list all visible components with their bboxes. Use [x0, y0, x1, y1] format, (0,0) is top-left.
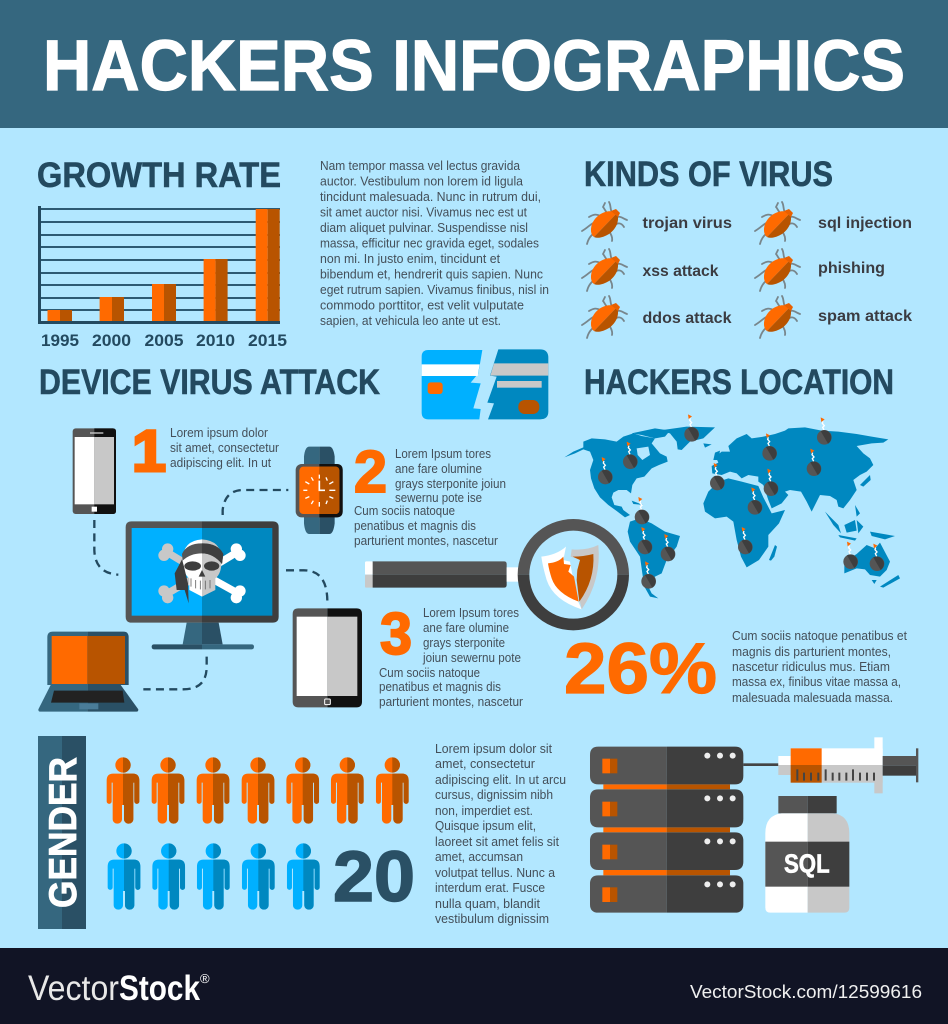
text block: growth rate description: sapien, at vehicula leo ante ut est.	[320, 314, 501, 328]
text block: step 2: Cum sociis natoque	[354, 504, 455, 518]
statistic: 26%: 26%	[564, 630, 717, 709]
item: ddos attack: ddos attack	[642, 310, 732, 327]
image id text: VectorStock.com/12599616	[690, 982, 922, 1002]
text block: gender description: nulla quam, blandit	[435, 897, 540, 911]
icon: monitor with pirate skull	[126, 521, 279, 649]
inland water	[637, 447, 650, 460]
text block: location description	[732, 629, 907, 705]
server unit 2	[590, 789, 743, 827]
logo: VectorStock: ®	[200, 971, 210, 986]
icon: laptop	[38, 632, 138, 712]
icon: SQL bottle	[765, 796, 849, 913]
icon: broken credit card	[422, 349, 548, 419]
heading: kinds of virus: KINDS OF VIRUS	[584, 155, 833, 194]
world map with bomb markers	[564, 414, 900, 598]
text block: step 3	[379, 606, 523, 709]
icon: SQL bottle: SQL	[784, 849, 830, 879]
text block: gender description: non, imperdiet est.	[435, 804, 533, 818]
icon: syringe	[743, 737, 918, 793]
crossbones	[158, 543, 246, 603]
text block: step 1: sit amet, consectetur	[170, 441, 279, 455]
text block: step 3: Cum sociis natoque	[379, 666, 480, 680]
panel: gender label: GENDER	[42, 757, 85, 908]
text block: gender description	[435, 742, 566, 926]
text block: growth rate description: non mi. In justo enim, tincidunt et	[320, 252, 500, 266]
heading: hackers location: HACKERS LOCATION	[584, 363, 894, 402]
list: kinds of virus	[582, 202, 912, 338]
icon: server stack	[590, 747, 743, 913]
year labels: 2005	[144, 331, 184, 350]
heading: growth rate: GROWTH RATE	[37, 156, 281, 195]
text block: step 3: joiun sewernu pote	[422, 651, 521, 665]
bar 2005	[152, 284, 176, 321]
text block: gender description: amet, consectetur	[435, 757, 535, 771]
text block: gender description: Lorem ipsum dolor sit	[435, 742, 552, 756]
bar 2000	[100, 297, 124, 321]
bar 2010	[204, 259, 228, 321]
bar 2015	[256, 209, 280, 321]
text block: gender description: amet, accumsan	[435, 850, 523, 864]
title banner	[0, 0, 948, 128]
server unit 1	[590, 747, 743, 784]
text block: growth rate description: eget rutrum sapien. Vivamus finibus, nisl in	[320, 283, 549, 297]
text block: gender description: volutpat tellus. Nunc a	[435, 866, 555, 880]
item: sql injection	[755, 202, 912, 244]
item: spam attack	[755, 296, 912, 338]
text block: gender description: vestibulum dignissim	[435, 912, 549, 926]
logo: VectorStock: VectorStock	[28, 969, 214, 1008]
number 2: 2	[354, 439, 387, 505]
year labels: 2010	[196, 331, 235, 350]
text block: step 2: grays sterponite joiun	[395, 477, 506, 491]
item: trojan virus: trojan virus	[642, 215, 732, 232]
icon: smartphone	[73, 428, 116, 514]
icon: tablet	[293, 608, 362, 707]
text block: step 3: penatibus et magnis dis	[379, 680, 501, 694]
text block: growth rate description: Nam tempor massa vel lectus gravida	[320, 159, 520, 173]
bomb markers	[598, 414, 884, 589]
server unit 3	[590, 832, 743, 870]
text block: growth rate description: bibendum et, hendrerit quis sapien. Nunc	[320, 268, 543, 282]
text block: step 2: parturient montes, nascetur	[354, 534, 498, 548]
year labels: 2000	[92, 331, 131, 350]
text block: growth rate description: tincidunt malesuada. Nunc in rutrum dui,	[320, 190, 541, 204]
icon: smartwatch	[296, 447, 343, 534]
icon: magnifying glass with shield	[365, 519, 629, 630]
text block: step 2: Lorem Ipsum tores	[395, 447, 491, 461]
map landmasses	[564, 427, 900, 598]
year labels	[41, 331, 287, 350]
text block: step 3: ane fare olumine	[423, 621, 509, 635]
text block: step 3: parturient montes, nascetur	[379, 695, 523, 709]
text block: gender description: laoreet sit amet felis sit	[435, 835, 559, 849]
text block: growth rate description: auctor. Vestibulum non lorem id ligula	[320, 174, 523, 188]
text block: step 1	[170, 426, 279, 470]
diagram: device network	[38, 428, 362, 712]
text block: location description: nascetur ridiculus mus. Etiam	[732, 660, 890, 674]
text block: step 3: Lorem Ipsum tores	[423, 606, 519, 620]
number 3: 3	[380, 601, 412, 667]
dashed connectors	[94, 490, 327, 689]
server unit 4	[590, 875, 743, 913]
bar chart: growth rate	[38, 206, 287, 350]
text block: step 2: ane fare olumine	[395, 462, 482, 476]
footer bar	[0, 948, 948, 1024]
item: xss attack: xss attack	[642, 263, 719, 280]
text block: step 1: Lorem ipsum dolor	[170, 426, 268, 440]
statistic: 20: 20	[333, 838, 415, 917]
item: xss attack	[582, 249, 719, 291]
illustration: server, syringe and SQL bottle	[590, 737, 918, 913]
text block: gender description: interdum erat. Fusce	[435, 881, 545, 895]
text block: location description: magnis dis parturient montes,	[732, 645, 891, 659]
heading: device virus attack: DEVICE VIRUS ATTACK	[39, 363, 380, 402]
text block: gender description: Quisque ipsum elit,	[435, 819, 536, 833]
item: phishing: phishing	[818, 260, 885, 277]
skull	[183, 539, 202, 597]
text block: growth rate description	[320, 159, 549, 328]
item: spam attack: spam attack	[818, 308, 912, 325]
text block: gender description: adipiscing elit. In ut arcu	[435, 773, 566, 787]
pictogram row: orange people	[107, 757, 409, 824]
text block: growth rate description: commodo porttitor, est velit vulputate	[320, 298, 524, 312]
year labels: 1995	[41, 331, 79, 350]
text block: growth rate description: massa, efficitur nec gravida eget, sodales	[320, 236, 539, 250]
item: phishing	[755, 249, 885, 291]
number 1: 1	[132, 419, 166, 484]
text block: step 3: grays sterponite	[423, 636, 505, 650]
pictogram row: blue people	[108, 843, 320, 910]
bar 1995	[48, 310, 72, 321]
item: ddos attack	[582, 296, 732, 338]
text block: growth rate description: diam aliquet pulvinar. Suspendisse nisl	[320, 221, 528, 235]
text block: location description: malesuada malesuada massa.	[732, 691, 893, 705]
item: trojan virus	[582, 202, 732, 244]
text block: step 2: sewernu pote ise	[395, 491, 482, 505]
text block: gender description: cursus, dignissim nibh	[435, 788, 553, 802]
text block: step 2: penatibus et magnis dis	[354, 519, 476, 533]
shield	[541, 547, 582, 609]
text block: step 1: adipiscing elit. In ut	[170, 456, 271, 470]
text block: location description: massa ex, finibus vitae massa a,	[732, 675, 901, 689]
item: sql injection: sql injection	[818, 215, 912, 232]
text block: step 2	[354, 447, 506, 548]
year labels: 2015	[248, 331, 287, 350]
text block: growth rate description: sit amet auctor nisi. Vivamus nec est ut	[320, 206, 527, 220]
text block: location description: Cum sociis natoque penatibus et	[732, 629, 907, 643]
title banner: HACKERS INFOGRAPHICS	[43, 27, 905, 106]
